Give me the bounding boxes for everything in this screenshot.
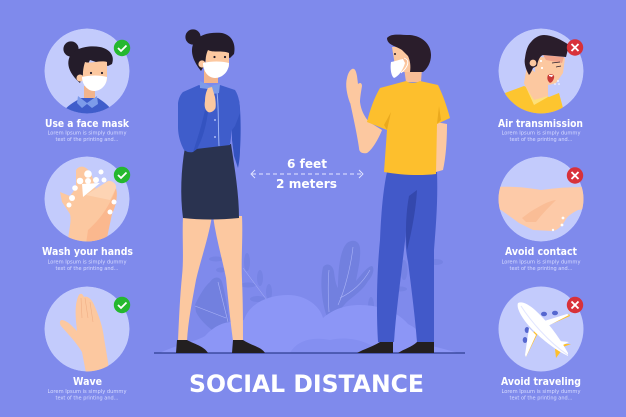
heading: Wave [73,376,102,388]
panel: air transmission [498,28,584,143]
hair [185,29,201,45]
title: SOCIAL DISTANCE [189,370,424,398]
body text: text of the printing and... [510,266,573,272]
icon: green check [114,167,130,183]
hair [387,35,431,72]
heading: Use a face mask [45,118,130,130]
body text: Lorem Ipsum is simply dummy [502,130,581,136]
icon: red cross [567,297,583,313]
body text: Lorem Ipsum is simply dummy [48,130,127,136]
icon: green check [114,40,130,56]
panel: wave [44,286,130,402]
body text: text of the printing and... [56,266,119,272]
trousers [377,172,437,342]
icon: coughing man [498,28,584,116]
body text: Lorem Ipsum is simply dummy [48,260,127,266]
icon: woman with mask [44,28,130,114]
heading: Avoid traveling [501,376,581,388]
back arm [232,100,241,168]
body text: text of the printing and... [56,137,119,143]
ear [402,58,408,62]
body text: text of the printing and... [510,137,573,143]
icon: red cross [567,39,583,56]
ground line [154,352,465,354]
hand at chest [205,87,216,112]
body text: Lorem Ipsum is simply dummy [502,260,581,266]
panel: use a face mask [44,28,130,143]
body text: Lorem Ipsum is simply dummy [48,389,127,395]
circle background [498,286,584,372]
neck [404,68,422,82]
panel: wash your hands [42,156,133,272]
face [206,50,229,72]
shoes [357,342,393,353]
background foliage and hills [160,241,458,353]
body text: text of the printing and... [510,396,573,402]
skirt [181,144,239,220]
body text: Lorem Ipsum is simply dummy [502,389,581,395]
heading: Wash your hands [42,246,133,258]
torso and sleeve [178,85,240,152]
icon: red cross [567,167,583,184]
panel: avoid traveling [498,286,584,402]
panel: avoid contact [497,156,585,272]
back arm [436,122,447,172]
shoes [176,340,208,353]
icon: airplane [518,302,571,358]
heading: Avoid contact [505,246,577,258]
raised arm [350,102,382,153]
collar [200,81,220,94]
neck [204,70,218,83]
dashed double arrow [251,170,363,178]
shirt [367,81,450,175]
heading: Air transmission [498,118,583,130]
mask [203,62,229,78]
distance label [251,156,363,191]
head skin [392,46,412,72]
legs [178,216,212,341]
figure: woman with mask [176,29,265,353]
figure: man with mask from behind [346,35,450,353]
icon: washing hands [44,156,130,244]
6 feet: 6 feet [287,156,327,171]
icon: green check [114,297,130,313]
mask [391,59,405,78]
2 meters: 2 meters [276,176,337,191]
icon: raised hand [44,286,130,373]
body text: text of the printing and... [56,396,119,402]
icon: handshake [497,156,585,242]
shirt placket [217,92,219,146]
raised hand [346,69,362,103]
